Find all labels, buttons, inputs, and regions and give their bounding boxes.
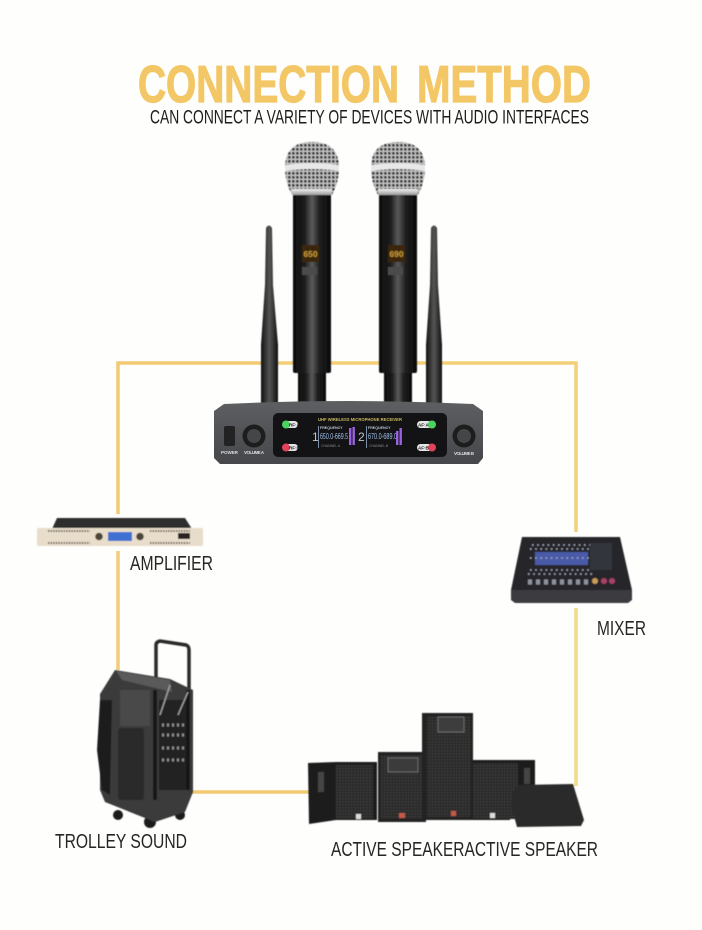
mic 1 head xyxy=(285,142,339,195)
channel 1 readout: FREQUENCY xyxy=(320,426,343,430)
channel 2 readout: 2 xyxy=(358,430,365,444)
channel 2 readout: 670.0-689.0 xyxy=(368,431,397,441)
mic 2 body xyxy=(379,192,417,373)
mixer knob rows xyxy=(528,545,592,574)
mic 2 display text: 690 xyxy=(390,250,404,259)
mixer xyxy=(511,537,632,603)
trolley top xyxy=(116,671,172,692)
amplifier switch xyxy=(178,533,190,539)
trolley carry handle xyxy=(118,728,144,800)
mic 1 button xyxy=(302,267,317,275)
trolley handle xyxy=(156,641,189,690)
connection lines xyxy=(118,363,576,792)
monitor speaker xyxy=(511,784,584,827)
left antenna xyxy=(261,226,278,405)
mic 2 collar xyxy=(378,189,418,195)
title: CONNECTION xyxy=(138,56,399,114)
speaker 1 xyxy=(308,762,377,824)
trolley side shadow xyxy=(97,700,112,795)
channel 1 readout: 1 xyxy=(312,430,319,444)
trolley carry recess xyxy=(120,690,150,726)
mixer blue channel strip xyxy=(535,552,588,565)
power label: POWER xyxy=(221,450,239,455)
mixer front lip xyxy=(511,590,632,603)
mic 2 display xyxy=(388,245,405,262)
trolley wheels xyxy=(113,810,185,828)
amplifier faceplate xyxy=(37,528,203,546)
amplifier display xyxy=(108,532,132,541)
mixer faders xyxy=(528,580,592,584)
speaker 4 xyxy=(470,760,535,820)
amplifier label: AMPLIFIER xyxy=(130,553,213,575)
mic 2 button xyxy=(388,267,403,275)
mic 2 head xyxy=(371,142,425,195)
receiver heading: UHF WIRELESS MICROPHONE RECEIVER xyxy=(318,417,403,422)
microphone 2 xyxy=(371,142,425,406)
trolley controls xyxy=(162,725,186,760)
trolley microphone clips xyxy=(160,685,188,715)
right antenna xyxy=(426,226,442,405)
mic 1 display text: 650 xyxy=(304,250,318,259)
mic 2 neck xyxy=(384,370,412,406)
receiver xyxy=(214,401,483,464)
mic 1 display xyxy=(302,245,319,262)
active speaker label: ACTIVE SPEAKERACTIVE SPEAKER xyxy=(331,839,598,861)
channel 1 readout: 650.0-669.5 xyxy=(320,431,348,441)
speaker 3 xyxy=(422,713,473,820)
RF A indicator xyxy=(282,420,300,428)
mic 1 collar xyxy=(292,189,332,195)
mixer coloured outputs xyxy=(592,578,615,584)
active speakers xyxy=(308,713,584,827)
RF B indicator: RF·B xyxy=(289,446,300,450)
volume B label: VOLUME B xyxy=(454,451,474,456)
mixer top surface xyxy=(511,537,632,590)
microphone 1 xyxy=(285,142,339,406)
volume B knob xyxy=(452,424,476,448)
amplifier xyxy=(37,518,203,546)
RF B indicator xyxy=(282,444,300,452)
AF A indicator: AF·A xyxy=(418,422,429,428)
receiver chassis xyxy=(214,401,483,464)
title: METHOD xyxy=(417,56,591,114)
speaker 2 xyxy=(378,752,426,822)
trolley body xyxy=(100,670,193,822)
trolley control panel xyxy=(159,700,189,790)
mic 2 ring xyxy=(371,163,425,171)
mic 1 ring xyxy=(285,163,339,171)
volume A knob xyxy=(242,424,266,448)
trolley handle struts xyxy=(155,690,188,800)
channel 1 readout: CHANNEL A xyxy=(321,444,341,448)
amplifier vents xyxy=(48,531,190,543)
mic 1 body xyxy=(293,192,331,373)
receiver front screen panel xyxy=(273,413,447,457)
AF B indicator xyxy=(417,444,436,452)
trolley speaker xyxy=(97,641,193,828)
volume A label: VOLUME A xyxy=(244,450,265,455)
amplifier top xyxy=(52,518,192,529)
amplifier knobs xyxy=(95,533,144,540)
channel 2 readout xyxy=(358,426,402,448)
power switch xyxy=(224,426,235,446)
channel 2 readout: FREQUENCY xyxy=(368,426,391,430)
mixer master section xyxy=(590,543,612,570)
AF A indicator xyxy=(417,420,436,428)
channel 1 readout xyxy=(312,426,355,448)
AF B indicator: AF·B xyxy=(418,446,429,450)
RF A indicator: RF·A xyxy=(289,422,300,428)
mixer label: MIXER xyxy=(597,618,646,640)
mic 1 neck xyxy=(298,370,326,406)
channel 2 readout: CHANNEL B xyxy=(369,444,389,448)
trolley label: TROLLEY SOUND xyxy=(55,831,187,853)
